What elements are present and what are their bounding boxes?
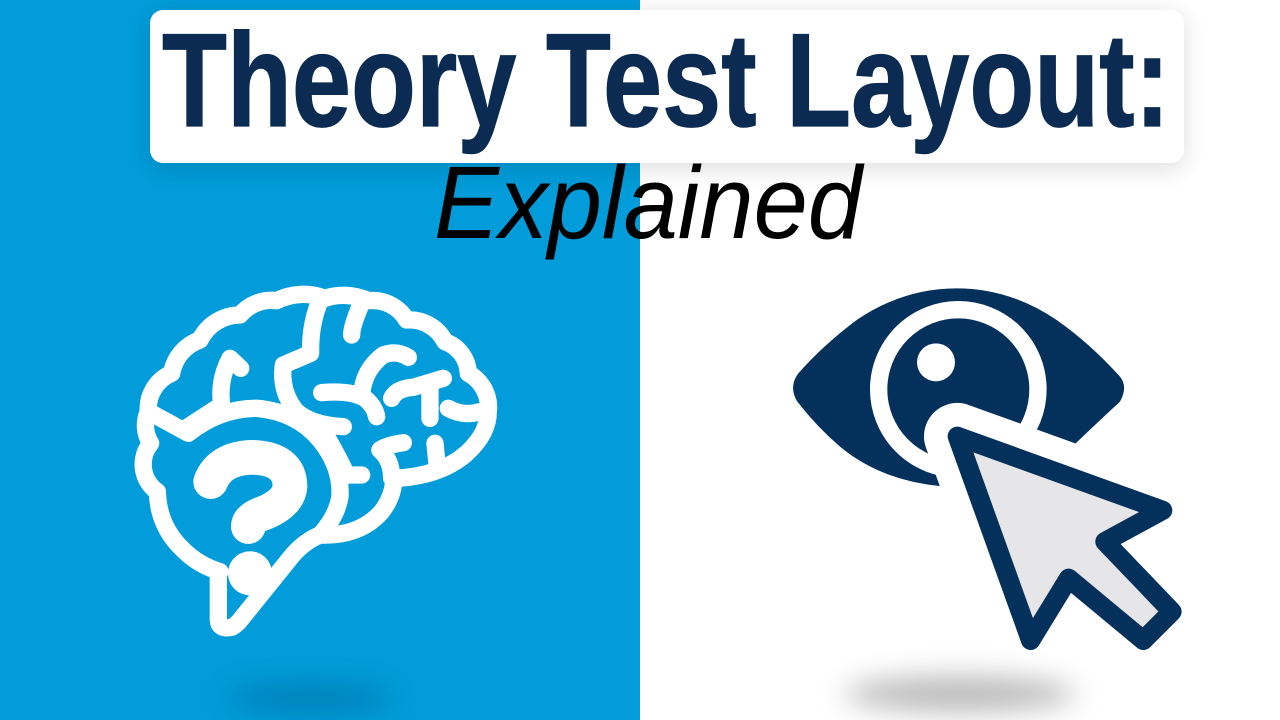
- panel: white right background: [640, 0, 1280, 720]
- eye ground shadow: [845, 677, 1075, 711]
- question mark dot: [228, 551, 272, 595]
- eye shape: [793, 288, 1124, 486]
- cursor halo: [957, 436, 1172, 640]
- title card shadow: [150, 14, 1184, 169]
- brain lobe arc around question mark: [152, 408, 340, 535]
- question mark: [211, 457, 290, 527]
- brain outline: [143, 294, 489, 628]
- brain fold lines: [188, 358, 241, 427]
- icon: brain with question mark: [143, 294, 489, 628]
- brain ground shadow: [228, 687, 392, 709]
- subtitle: Explained: [434, 145, 865, 260]
- iris ring: [879, 310, 1038, 469]
- icon: eye with cursor: [793, 288, 1172, 640]
- pupil highlight: [917, 343, 955, 381]
- panel: blue left background: [0, 0, 640, 720]
- cursor arrow: [957, 436, 1172, 640]
- title card: [150, 10, 1184, 163]
